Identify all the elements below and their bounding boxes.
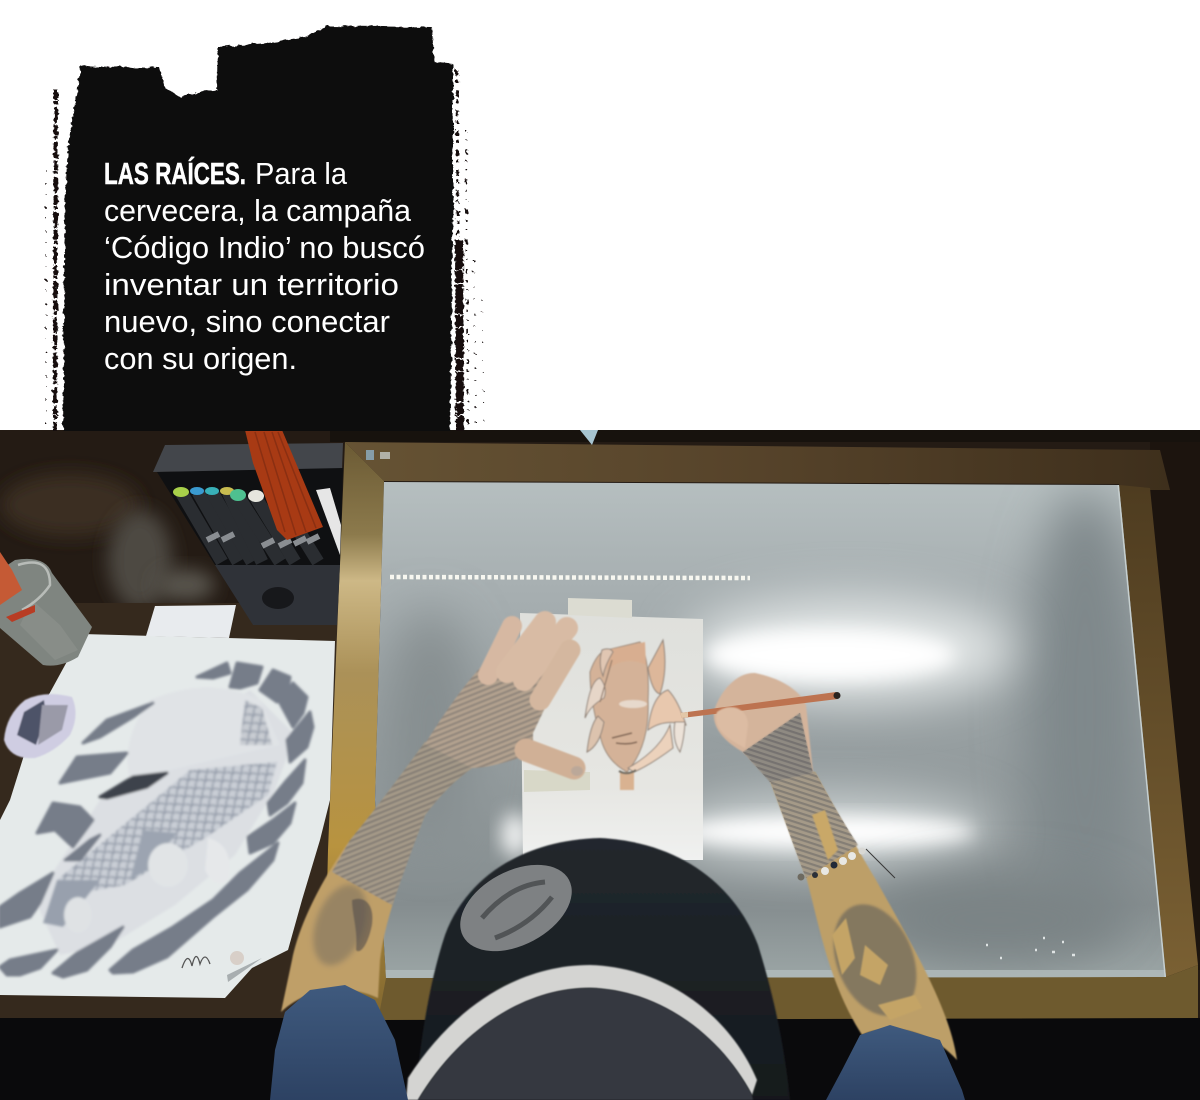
fingers — [488, 626, 512, 675]
wooden frame of the light table — [324, 430, 1198, 1020]
glass light panel — [370, 480, 1170, 980]
shirt sleeves — [270, 985, 965, 1100]
photo: tattoo artist drawing on a light table — [0, 430, 1200, 1100]
forearm — [768, 772, 957, 1060]
dark wave scallops — [0, 663, 313, 977]
cap — [406, 838, 790, 1100]
hand — [714, 673, 813, 780]
drawing: corn with a face — [585, 640, 686, 790]
signature — [182, 956, 210, 968]
pencil — [680, 692, 838, 718]
left arm and hand with tattoos — [281, 622, 583, 1012]
caption text: con su origen. — [104, 341, 297, 376]
right arm, hand and pencil — [680, 673, 957, 1060]
black brush-stroke text panel — [46, 26, 484, 440]
caption text — [104, 156, 425, 376]
red tassel — [245, 430, 323, 540]
caption text: ‘Código Indio’ no buscó — [104, 230, 425, 265]
bracelet — [798, 848, 895, 880]
pencil cup — [0, 552, 92, 666]
brush-stroke shape — [46, 26, 484, 440]
LED strip reflection — [390, 577, 750, 578]
small sticker sketch — [4, 694, 76, 758]
paper with drawing — [520, 598, 703, 860]
caption text: cervecera, la campaña — [104, 193, 412, 228]
white note paper — [146, 605, 236, 638]
caption text: nuevo, sino conectar — [104, 304, 390, 339]
koi tattoo drawing on paper — [0, 634, 335, 998]
caption text: inventar un territorio — [104, 267, 399, 302]
marker box — [153, 443, 343, 625]
crown with white piping — [406, 965, 757, 1100]
forearm — [280, 844, 394, 1012]
desk background — [0, 430, 1200, 1100]
caption text: LAS RAÍCES. — [104, 156, 246, 191]
palm — [426, 670, 544, 768]
caption text: Para la — [255, 156, 348, 191]
fish head shading — [43, 880, 100, 927]
fish and waves light body — [35, 690, 295, 955]
